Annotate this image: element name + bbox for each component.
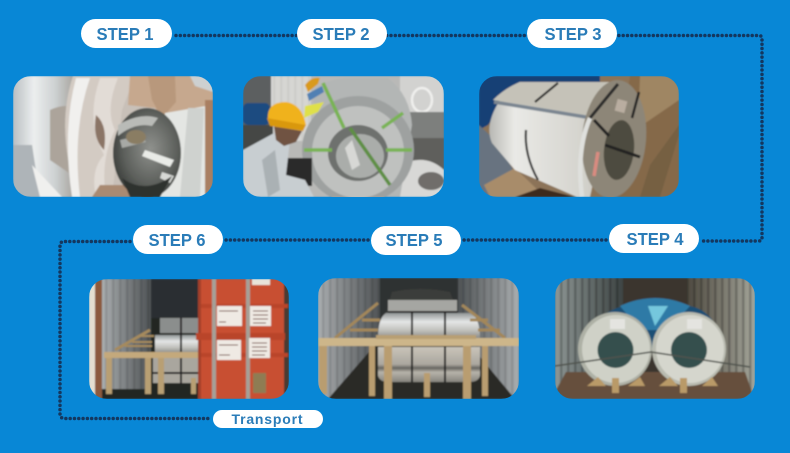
label: step 1: STEP 1 xyxy=(96,24,154,44)
label: step 6: STEP 6 xyxy=(148,230,206,250)
label: transport: Transport xyxy=(232,411,303,427)
label: step 4: STEP 4 xyxy=(626,229,684,249)
photo: step 4 container with two coils xyxy=(555,278,755,399)
photo: step 5 container with long coil row xyxy=(318,278,519,399)
label: step 2: STEP 2 xyxy=(312,24,370,44)
photo: step 1 wrapped coil xyxy=(13,76,213,198)
photo: step 3 galvanized coil xyxy=(479,76,679,201)
label: step 2 xyxy=(297,19,387,48)
label: transport xyxy=(213,410,323,428)
label: step 4 xyxy=(609,224,699,253)
label: step 3: STEP 3 xyxy=(544,24,602,44)
photo: step 6 container with open red door xyxy=(89,279,289,399)
dotted process connector xyxy=(60,36,762,418)
photo: step 2 worker inspecting coil xyxy=(243,76,444,204)
label: step 5: STEP 5 xyxy=(386,230,443,250)
label: step 6 xyxy=(133,225,223,254)
label: step 5 xyxy=(371,226,461,255)
label: step 3 xyxy=(527,19,617,48)
label: step 1 xyxy=(81,19,172,48)
